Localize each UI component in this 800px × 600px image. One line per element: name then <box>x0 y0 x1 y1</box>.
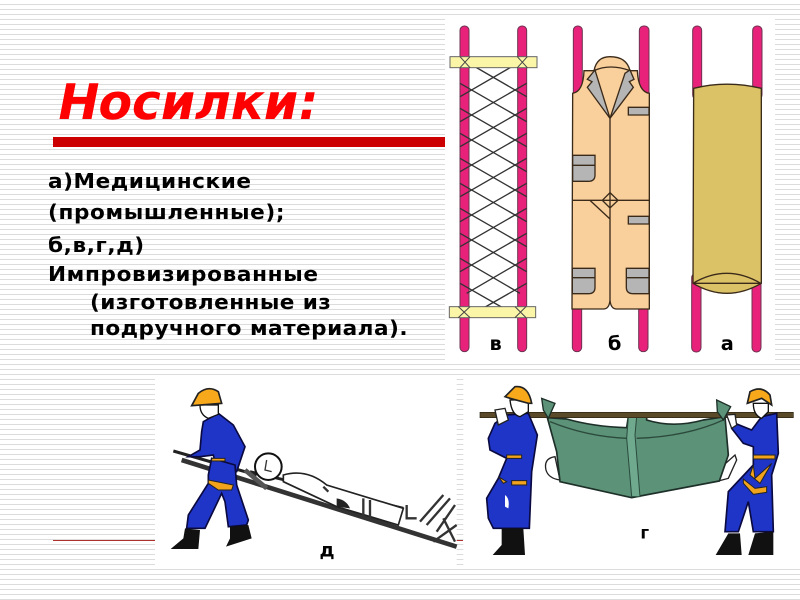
title underline bar <box>53 137 448 147</box>
label д: д <box>319 541 335 562</box>
body text: (промышленные); <box>48 201 285 224</box>
body text: б,в,г,д) <box>48 234 144 257</box>
panel: improvised stretcher г <box>463 377 800 567</box>
panel: improvised stretcher д <box>155 377 457 567</box>
body text: а)Медицинские <box>48 170 251 193</box>
stretcher and patient <box>173 451 457 547</box>
right worker <box>716 389 778 555</box>
stretcher б <box>572 26 649 352</box>
body text <box>48 170 408 340</box>
stretcher в <box>449 26 537 352</box>
body text: Импровизированные <box>48 263 318 286</box>
label а: а <box>721 332 734 355</box>
title: Носилки: <box>53 73 324 131</box>
panel: stretcher types в б а <box>445 15 775 363</box>
body text: подручного материала). <box>90 317 408 340</box>
stretcher а <box>692 26 762 352</box>
blanket stretcher <box>480 398 793 498</box>
label б: б <box>608 332 621 355</box>
left worker <box>487 387 537 555</box>
worker <box>171 389 252 549</box>
label г: г <box>640 523 649 542</box>
thin footer line <box>53 540 463 541</box>
body text: (изготовленные из <box>90 291 331 314</box>
label в: в <box>490 332 502 355</box>
